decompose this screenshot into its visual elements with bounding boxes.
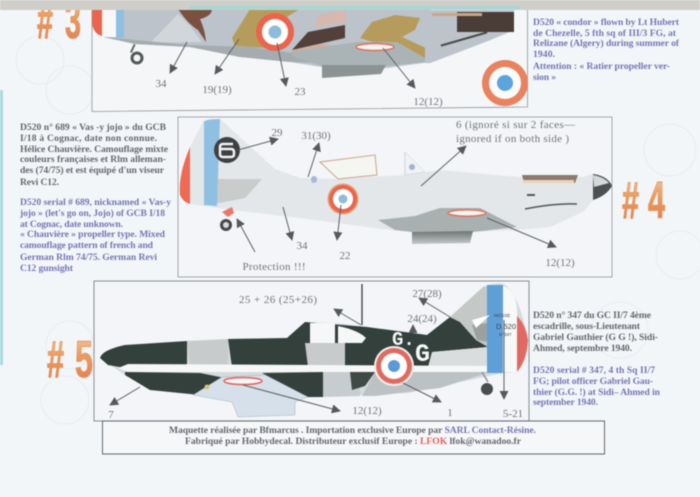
footer credits box: Fabriqué par Hobbydecal. Distributeur exclusif Europe : LFOK lfok@wanadoo.fr [185,436,522,447]
labels for aircraft 5: 7 [108,409,114,421]
text block: D520 347 English [533,365,661,408]
code letters G.G [392,329,430,369]
labels for aircraft 3: 34 [156,78,167,90]
cowl panel line [441,31,487,47]
text block: D520 689 French: D520 n° 689 « Vas -y jojo » du GCB [20,122,167,133]
labels for aircraft 4: 31(30) [301,130,331,142]
labels for aircraft 5: 24(24) [407,313,437,325]
text block: D520 689 French: Hélice Chauvière. Camouflage mixte [20,144,169,155]
labels for aircraft 5: 25 + 26 (25+26) [239,294,317,306]
labels for aircraft 4 [242,119,576,273]
roundel on fuselage 4 [328,184,358,214]
footer credits box: Maquette réalisée par Bfmarcus . Importation exclusive Europe par SARL Contact-Résine. [169,425,536,436]
text block: D520 347 English: D520 serial # 347, 4 th Sq II/7 [533,365,655,376]
text block: D520 condor: D520 « condor » flown by Lt Hubert [533,17,680,28]
text block: D520 689 French: des (74/75) et est équipé d'un viseur [20,165,165,176]
arrows for aircraft 3 [170,39,415,88]
text block: D520 689 French: I/18 à Cognac, date non connue. [20,133,157,144]
labels for aircraft 3: 23 [294,86,306,98]
text block: D520 689 French: Revi C12. [20,177,59,188]
labels for aircraft 4: Protection !!! [242,261,306,273]
scanner edge at top and left [0,0,700,365]
number: # 3 [37,0,81,50]
labels for aircraft 3: 12(12) [413,96,443,108]
arrow 12(12) [487,218,556,247]
arrow 25+26 [334,309,361,325]
arrow 6 [421,146,466,186]
tail marking: N°347 [499,332,512,337]
labels for aircraft 5: 1 [447,407,453,419]
labels for aircraft 5: 12(12) [352,405,382,417]
text block: D520 347 French: Gabriel Gauthier (G G !), Sidi- [533,332,658,343]
number: # 5: # [47,331,64,389]
text block: D520 689 English [19,197,171,274]
number: # 4: # [622,172,639,230]
labels for aircraft 4: 6 (ignoré si sur 2 faces— [456,119,576,131]
arrow 31(30) [308,143,319,177]
panel frame 3 [92,5,528,112]
text block: D520 689 English: « Chauvière » propeller type. Mixed [20,229,166,240]
footer credits box [102,421,604,454]
panel: aircraft 5 [94,281,529,421]
labels for aircraft 4: 34 [296,240,308,252]
nose dark camouflage patch [457,12,514,32]
text block: D520 689 French [20,122,169,188]
text block: D520 689 English: jojo » (let's go on, Jojo) of GCB I/18 [19,208,165,219]
labels for aircraft 3 [156,78,443,108]
text block: D520 689 English: D520 serial # 689, nicknamed « Vas-y [20,197,171,208]
badge 6 [214,137,240,163]
text block: D520 689 English: German Rlm 74/75. German Revi [20,252,157,263]
number: # 5 [47,331,93,389]
panel: aircraft 3 [92,5,528,112]
arrow 1 [403,383,441,402]
exhaust stack [432,13,482,16]
text block: D520 689 English: camouflage pattern of french and [20,240,154,251]
labels for aircraft 4: ignored if on both side ) [456,133,569,145]
code letters G.G: G [415,340,430,369]
tail marking [494,313,516,337]
aircraft 3 wing [290,15,445,78]
text block: D520 347 English: thier (G.G. !) at Sidi– Ahmed in [533,387,661,398]
labels for aircraft 4: 29 [272,127,283,139]
number: # 4 [622,172,665,230]
code letters G.G: G. [392,329,415,351]
arrow 27(28) [419,298,450,317]
arrow 34 [283,207,292,240]
arrow 22 [337,205,341,240]
large roundel [482,60,528,106]
arrow 5-21 [503,320,505,399]
panel frame 4 [178,117,612,277]
text block: D520 condor: Attention : « Ratier propeller ver- [533,61,670,72]
arrow protection [237,219,255,252]
text block: D520 condor [533,17,680,83]
text block: D520 condor: sion » [533,72,556,83]
aircraft 4 illustration [180,119,612,244]
arrow 12(12) [243,385,340,411]
text block: D520 347 French [533,310,658,354]
arrow 24(24) [412,325,414,333]
tail marking: D.520 [496,322,516,331]
roundel on fuselage 3 [256,13,294,51]
nose fuselage [425,10,514,63]
labels for aircraft 4: 22 [340,250,350,262]
labels for aircraft 5: 27(28) [412,288,442,300]
text block: D520 condor: 1940. [533,49,555,60]
text block: D520 condor: Relizane (Algery) during summer of [533,38,680,49]
panel frame 5 [94,281,529,421]
arrow 29 [238,139,278,150]
text block: D520 347 English: september 1940. [533,397,598,408]
text block: D520 689 English: C12 gunsight [20,263,74,274]
panel: aircraft 4 [178,117,612,277]
number: # 4: 4 [648,172,665,230]
roundel on fuselage 5 [374,346,414,386]
text block: D520 689 French: couleurs françaises et Rlm alleman- [20,154,166,165]
labels for aircraft 5 [108,288,523,421]
labels for aircraft 3: 19(19) [202,84,232,96]
aircraft 3 illustration [92,9,430,68]
aircraft 5 illustration [100,283,528,417]
labels for aircraft 4: 12(12) [545,257,575,269]
text block: D520 condor: de Chezelle, 5 fth sq of III/3 FG, at [533,28,677,39]
labels for aircraft 5: 5-21 [503,408,523,420]
number: # 5: 5 [75,331,93,389]
text block: D520 347 French: Ahmed, septembre 1940. [533,343,632,354]
arrow 7 [110,387,140,405]
text block: D520 347 English: FG; pilot officer Gabriel Gau- [533,376,653,387]
text block: D520 347 French: D520 n° 347 du GC II/7 4ème [533,310,652,321]
tail marking: MOSSE [494,313,510,318]
text block: D520 347 French: escadrille, sous-Lieutenant [533,321,641,332]
text block: D520 689 English: at Cognac, date unknown. [20,219,123,230]
aircraft 3 nose [424,10,515,64]
